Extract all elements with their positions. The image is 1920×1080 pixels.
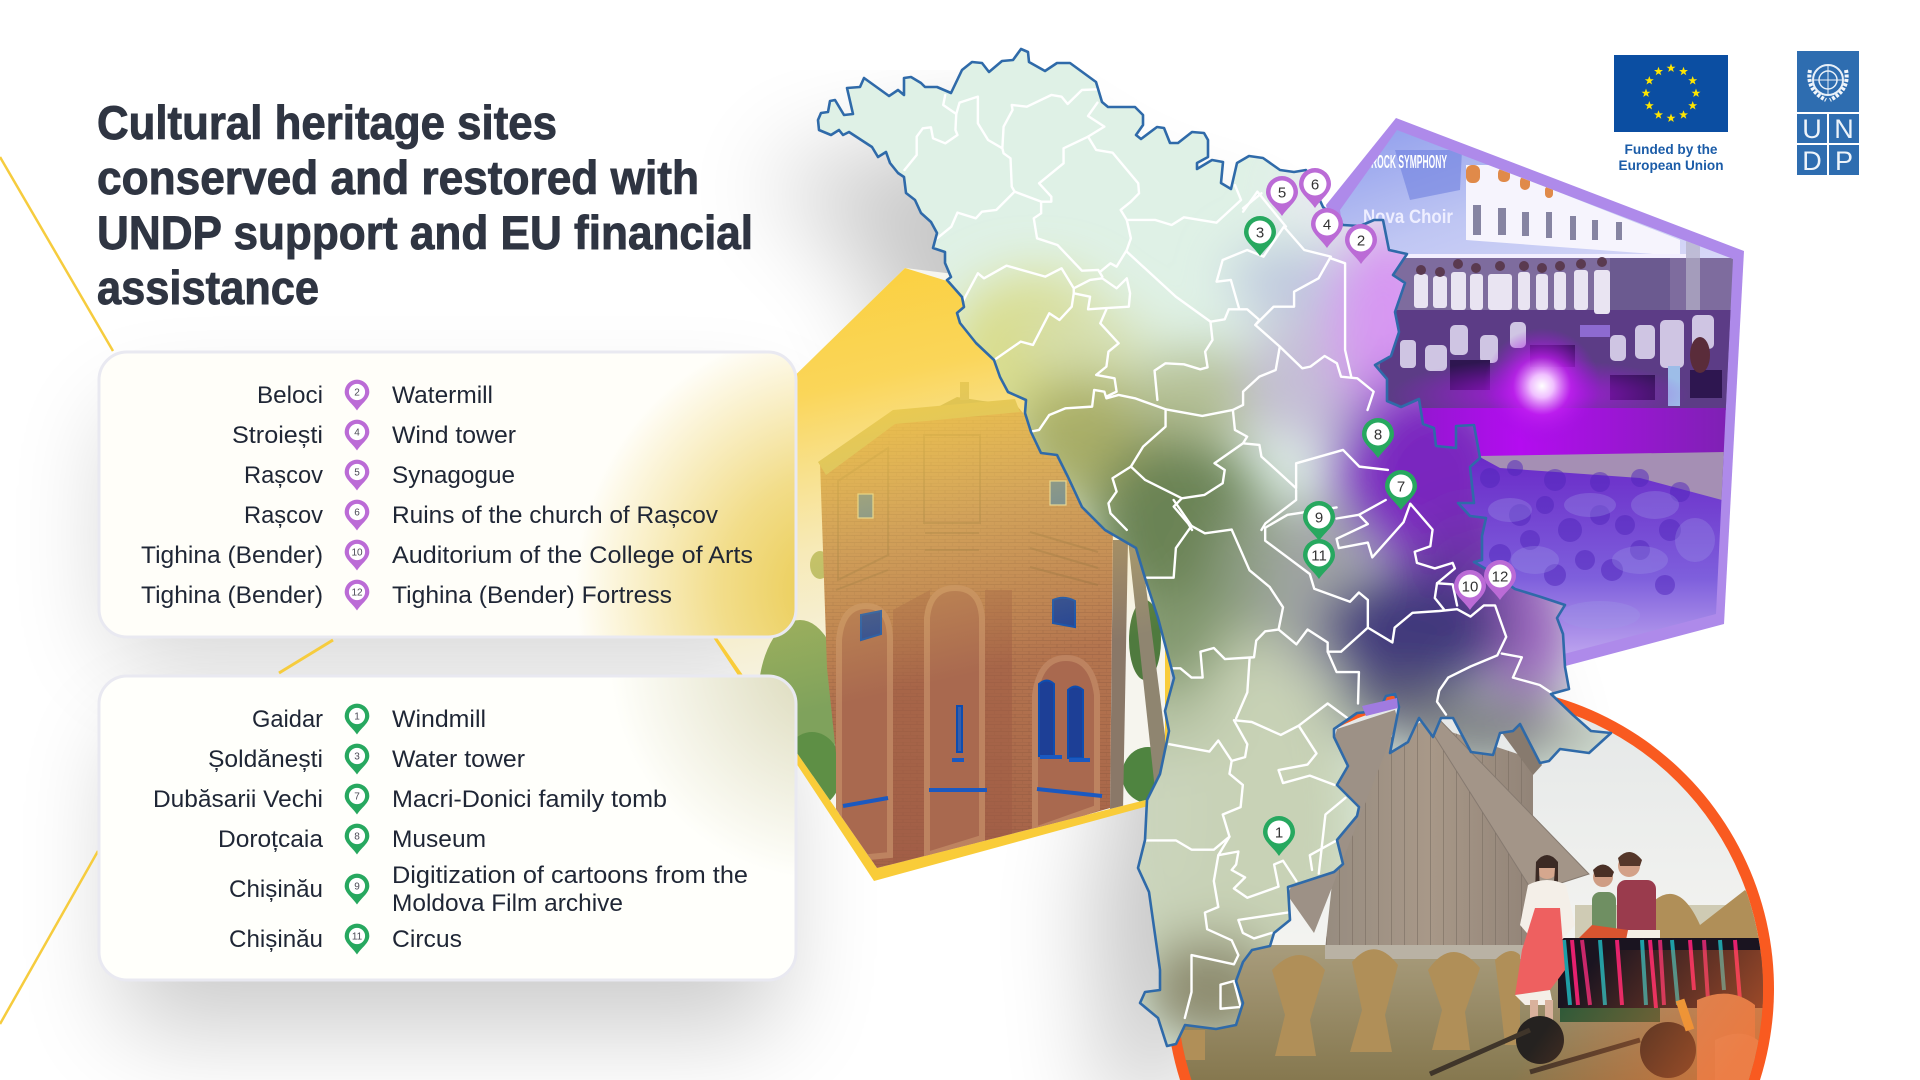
- crowd heads and shoulders: [1480, 460, 1690, 595]
- tower photo: [718, 268, 1165, 868]
- wagon chassis: [1560, 1008, 1660, 1022]
- row: Rașcov synagogue: Rașcov: [244, 462, 323, 489]
- projected singers: [1466, 165, 1680, 256]
- logo: EU flag with funding line: [1614, 55, 1728, 173]
- wheat sheaves: [1177, 890, 1761, 1060]
- stage front: [1340, 408, 1740, 458]
- letter tiles: D: [1802, 146, 1822, 176]
- wagon blanket: [1558, 938, 1763, 1008]
- card background: [99, 352, 796, 637]
- mill foot: [1325, 945, 1565, 959]
- pin 8: 8: [1374, 426, 1382, 444]
- choir shirts: [1414, 270, 1610, 314]
- pin 7: [1385, 470, 1417, 510]
- pin 9: 9: [1315, 510, 1323, 526]
- row: Tighina fortress: 12: [351, 587, 363, 598]
- pin 10: 10: [1462, 578, 1478, 596]
- map pins: [1244, 168, 1516, 856]
- districts: south: [1145, 500, 1551, 1018]
- panel: purple sites legend: [99, 352, 796, 637]
- row: Doroțcaia: [218, 824, 486, 854]
- row: Gaidar: [252, 704, 486, 734]
- pin 7: 7: [1397, 478, 1405, 496]
- funding text: European Union: [1618, 158, 1724, 173]
- arches: [839, 588, 1097, 860]
- row: Beloci: [257, 380, 493, 410]
- decorative yellow line: between cards: [279, 640, 333, 673]
- corn cobs: [1680, 1000, 1690, 1030]
- letter tiles: U: [1802, 114, 1822, 144]
- soft shadows: [110, 119, 1561, 1080]
- truss: [1686, 241, 1700, 310]
- row: Tighina fortress: [141, 580, 672, 610]
- windmill photo: [1177, 696, 1763, 1080]
- row: Chișinău circus: [229, 924, 462, 954]
- row: Chișinău film archive: Chișinău: [229, 876, 323, 903]
- horizon field: [1575, 905, 1763, 947]
- trees: [758, 551, 1174, 808]
- grain sacks: [1697, 994, 1763, 1080]
- title: Cultural heritage sites: [97, 96, 557, 149]
- row: Doroțcaia: Museum: [392, 826, 486, 853]
- purple frame: [1326, 118, 1744, 668]
- roof: [818, 382, 1020, 475]
- yellow frame: [640, 268, 1170, 881]
- row: Tighina auditorium: [141, 540, 753, 570]
- blue windows: [861, 598, 1083, 758]
- pin 4: 4: [1323, 216, 1331, 234]
- pin 3: 3: [1256, 224, 1264, 242]
- photo panel: brick water tower: [714, 268, 1170, 881]
- logo: UNDP: [1797, 51, 1859, 176]
- row: Gaidar: Windmill: [392, 706, 486, 733]
- row: Chișinău film archive: 9: [354, 881, 360, 892]
- pin 2: 2: [1357, 232, 1365, 250]
- row: Tighina fortress: Tighina (Bender) Fortress: [392, 582, 672, 609]
- photo panel: concert: [1326, 118, 1744, 668]
- EU flag: [1614, 55, 1728, 132]
- map of Moldova: [800, 30, 1630, 1060]
- photo panel: windmill and dancers: [1166, 685, 1774, 1080]
- concert photo: [1340, 125, 1740, 658]
- UN emblem block: [1797, 51, 1859, 112]
- row: Beloci: Watermill: [392, 382, 493, 409]
- lawn: [1478, 452, 1725, 500]
- row: Gaidar: 1: [354, 711, 360, 722]
- row: Dubăsarii Vechi: Macri-Donici family tomb: [392, 786, 667, 813]
- projected hair: [1466, 165, 1553, 198]
- row: Tighina auditorium: Auditorium of the College of Arts: [392, 542, 753, 569]
- title: UNDP support and EU financial: [97, 206, 753, 259]
- map fill: [800, 30, 1630, 1060]
- orange tint: [1500, 950, 1763, 1080]
- row: Doroțcaia: 8: [354, 831, 360, 842]
- row: Rașcov church: 6: [354, 507, 360, 518]
- row: Chișinău circus: Chișinău: [229, 926, 323, 953]
- colour mesh: [950, 168, 1620, 1050]
- title: [97, 96, 753, 314]
- concert photo: ROCK SYMPHONY: [1371, 152, 1447, 172]
- pin 11: 11: [1311, 548, 1327, 564]
- row: Dubăsarii Vechi: Dubăsarii Vechi: [153, 786, 323, 813]
- mill body: [1325, 722, 1533, 950]
- row: Stroiești: 4: [354, 427, 360, 438]
- districts: north and centre: [904, 89, 1388, 530]
- pin 6: 6: [1311, 176, 1319, 194]
- third dancer: [1600, 852, 1660, 944]
- row: Rașcov synagogue: 5: [354, 467, 360, 478]
- screen caption: Nova Choir: Nova Choir: [1363, 207, 1454, 228]
- row: Chișinău film archive: [229, 862, 748, 917]
- row: Rașcov synagogue: Synagogue: [392, 462, 515, 489]
- panel: green sites legend: [99, 676, 796, 980]
- wagon front wheel: [1516, 1016, 1564, 1064]
- stage light flare: [1484, 328, 1600, 444]
- row: Beloci: Beloci: [257, 382, 323, 409]
- wagon shaft: [1430, 1030, 1640, 1074]
- pin 6: [1299, 168, 1331, 208]
- pin 5: 5: [1278, 184, 1286, 202]
- yellow overlay: [718, 268, 1154, 688]
- pillars: [893, 590, 1012, 868]
- screen dark patch: [1395, 150, 1462, 200]
- white frame of screen: [1395, 254, 1686, 258]
- row: Gaidar: Gaidar: [252, 706, 323, 733]
- row: Stroiești: Wind tower: [392, 422, 516, 449]
- musicians: [1400, 315, 1714, 406]
- row: Șoldănești: Water tower: [392, 746, 525, 773]
- row: Șoldănești: Șoldănești: [208, 746, 323, 773]
- decorative yellow line: lower left: [0, 851, 98, 1024]
- windows: [858, 481, 1066, 518]
- decorative yellow line: upper left: [0, 157, 113, 351]
- map outline: [818, 49, 1611, 1046]
- upper roof edge: [1502, 724, 1542, 775]
- row: Dubăsarii Vechi: 7: [354, 791, 360, 802]
- row: Șoldănești: [208, 744, 525, 774]
- pin 3: [1244, 216, 1276, 256]
- pin 4: [1311, 208, 1343, 248]
- letter tiles: N: [1834, 114, 1854, 144]
- wagon rear wheel: [1640, 1022, 1696, 1078]
- left sail: [1288, 710, 1398, 933]
- orchestra band: [1380, 310, 1740, 410]
- dark instruments: [1450, 337, 1722, 400]
- pin 1: [1263, 816, 1295, 856]
- blue ledges: [843, 757, 1102, 806]
- right sail: [1430, 715, 1589, 892]
- pin 11: [1303, 539, 1335, 579]
- screen shadows: [1473, 205, 1622, 240]
- title: conserved and restored with: [97, 151, 699, 204]
- poles: [1110, 540, 1165, 809]
- pin 5: [1266, 176, 1298, 216]
- row: Tighina auditorium: Tighina (Bender): [141, 542, 323, 569]
- crowd base: [1340, 458, 1740, 658]
- title: assistance: [97, 261, 319, 314]
- row: Șoldănești: 3: [354, 751, 360, 762]
- letter tiles: [1797, 114, 1859, 176]
- row: Stroiești: [232, 420, 516, 450]
- row: Doroțcaia: Doroțcaia: [218, 826, 324, 853]
- pin 2: [1345, 224, 1377, 264]
- row: Rașcov church: Rașcov: [244, 502, 323, 529]
- row: Rașcov church: Ruins of the church of Rașcov: [392, 502, 718, 529]
- purple sliver in notch: [1362, 698, 1398, 716]
- crowd shirts: [1488, 491, 1715, 629]
- stage floor glow: [1390, 359, 1690, 431]
- row: Chișinău film archive: Moldova Film archive: [392, 890, 623, 917]
- funding text: [1618, 142, 1724, 173]
- pin 10: [1454, 570, 1486, 610]
- row: Tighina fortress: Tighina (Bender): [141, 582, 323, 609]
- stage backdrop: [1377, 258, 1733, 408]
- row: Stroiești: Stroiești: [232, 422, 323, 449]
- row: Chișinău film archive: Digitization of cartoons from the: [392, 862, 748, 889]
- row: Rașcov church: [244, 500, 718, 530]
- pin 8: [1362, 418, 1394, 458]
- orange ring: [1166, 685, 1774, 1080]
- card background: [99, 676, 796, 980]
- first dancer: [1515, 855, 1575, 1038]
- row: Beloci: 2: [354, 387, 360, 398]
- row: Chișinău circus: 11: [352, 931, 363, 942]
- choir heads: [1416, 257, 1607, 277]
- ground: [1177, 945, 1763, 1080]
- tower body: [820, 401, 1113, 875]
- pin 12: [1484, 560, 1516, 600]
- row: Tighina auditorium: 10: [351, 547, 363, 558]
- pin 9: [1303, 501, 1335, 541]
- row: Dubăsarii Vechi: [153, 784, 667, 814]
- pin 1: 1: [1275, 824, 1283, 842]
- second dancer: [1572, 864, 1628, 945]
- letter tiles: P: [1835, 146, 1853, 176]
- wall panels: [836, 435, 1098, 590]
- row: Chișinău circus: Circus: [392, 926, 462, 953]
- funding text: Funded by the: [1624, 142, 1718, 157]
- row: Rașcov synagogue: [244, 460, 515, 490]
- foliage backdrop: [1610, 258, 1670, 310]
- pin 12: 12: [1492, 568, 1508, 586]
